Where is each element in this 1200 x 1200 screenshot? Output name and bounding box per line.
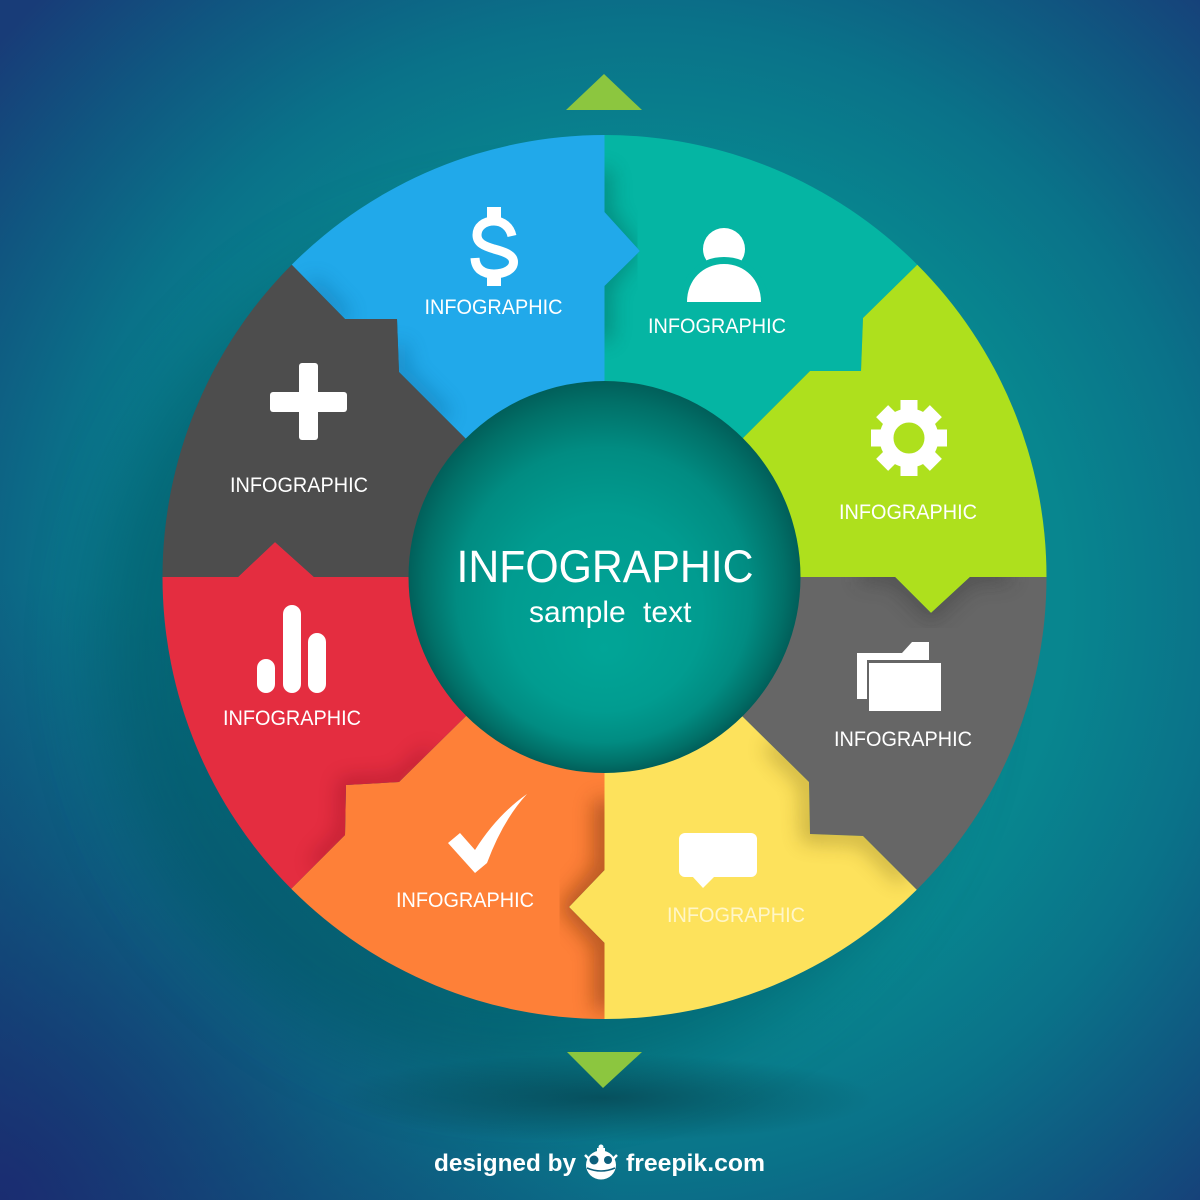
hub title: INFOGRAPHIC: [456, 541, 754, 592]
label: red: INFOGRAPHIC: [223, 707, 361, 730]
center hub: [408, 381, 800, 773]
icon: folders: [857, 642, 941, 711]
label: teal: INFOGRAPHIC: [648, 315, 786, 338]
wheel: [162, 135, 1046, 1019]
icon: bar chart: [257, 605, 326, 693]
label: dark grey: INFOGRAPHIC: [230, 474, 368, 497]
icon: person: [687, 228, 761, 302]
icon: robot logo: [585, 1144, 617, 1180]
bottom arrow: [567, 1052, 642, 1088]
panel: mid grey segment: [742, 577, 1046, 890]
wheel drop shadow: [100, 220, 960, 1080]
panel: red segment: [162, 542, 466, 889]
label: lime: INFOGRAPHIC: [839, 501, 977, 524]
icon: check mark: [448, 794, 527, 873]
label: yellow: INFOGRAPHIC: [667, 904, 805, 927]
panel: dark grey segment: [162, 264, 466, 577]
label: blue: INFOGRAPHIC: [424, 296, 562, 319]
label: orange: INFOGRAPHIC: [396, 889, 534, 912]
footer credit: freepik.com: [626, 1150, 765, 1177]
panel: blue segment: [292, 135, 640, 438]
panel: lime segment: [742, 264, 1046, 613]
top arrow: [566, 74, 642, 110]
label: mid grey: INFOGRAPHIC: [834, 728, 972, 751]
icon: dollar sign: [475, 207, 514, 286]
ground shadow: [334, 1054, 874, 1142]
icon: plus: [270, 363, 347, 440]
panel: teal segment: [604, 135, 918, 438]
footer credit: designed by: [434, 1150, 577, 1177]
panel: yellow segment: [569, 716, 917, 1019]
hub subtitle: sample text: [529, 596, 692, 629]
panel: orange segment: [291, 716, 604, 1019]
icon: gear: [871, 400, 947, 476]
footer credit: [434, 1144, 765, 1180]
icon: speech bubble: [679, 833, 757, 888]
